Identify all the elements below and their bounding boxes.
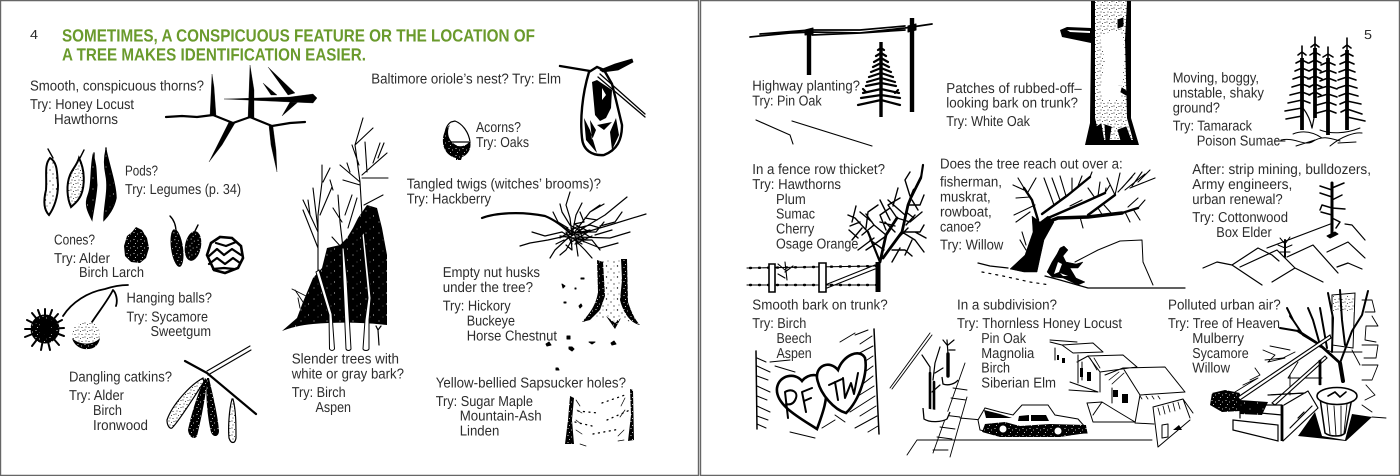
- text: hanging balls: [126, 290, 212, 340]
- text: subdivision: Pin Oak: [981, 331, 1027, 347]
- icon: bark with sapsucker holes: [565, 389, 634, 446]
- text: acorns: Try: Oaks: [476, 135, 529, 151]
- icon: tamarack trees: [1275, 37, 1365, 146]
- text: rubbed bark: looking bark on trunk?: [946, 96, 1078, 112]
- text: witches' brooms: [407, 176, 601, 208]
- text: catkins: Birch: [93, 403, 122, 419]
- text: nut husks: under the tree?: [443, 280, 533, 296]
- title: SOMETIMES, A CONSPICUOUS FEATURE OR THE LOCATION OF: [62, 26, 535, 46]
- icon: urban steps, trash can and tree of heaven: [1210, 290, 1386, 441]
- icon: pods: [44, 148, 116, 220]
- text: catkins: Ironwood: [93, 418, 148, 434]
- text: nut husks: Empty nut husks: [443, 265, 540, 281]
- icon: hanging balls: [25, 285, 128, 350]
- icon: trunk with nut husks: [546, 259, 640, 370]
- icon: thorny branches: [166, 65, 317, 172]
- text: cones: [54, 232, 144, 281]
- text: pods: [125, 164, 241, 198]
- text: thorns: Try: Honey Locust: [30, 97, 134, 113]
- text: boggy ground: ground?: [1173, 100, 1220, 116]
- text: strip mining: [1192, 162, 1371, 241]
- text: sapsucker holes: Mountain-Ash: [460, 409, 542, 425]
- text: smooth bark: Aspen: [776, 346, 812, 362]
- text: nut husks: Buckeye: [467, 314, 515, 330]
- text: fence row: [752, 162, 885, 253]
- text: subdivision: In a subdivision?: [957, 298, 1057, 314]
- text: rubbed bark: Try: White Oak: [946, 114, 1031, 130]
- text: smooth bark: Smooth bark on trunk?: [752, 298, 888, 314]
- text: slender trees: Slender trees with: [292, 352, 399, 368]
- text: boggy ground: Poison Sumac: [1197, 134, 1280, 150]
- text: polluted urban air: Sycamore: [1192, 346, 1249, 362]
- text: rubbed bark: Patches of rubbed-off–: [946, 81, 1082, 97]
- text: sapsucker holes: Yellow-bellied Sapsucker holes?: [436, 376, 626, 392]
- text: willow: canoe?: [940, 219, 981, 235]
- text: subdivision: Magnolia: [981, 346, 1034, 362]
- icon: catkins: [167, 346, 256, 442]
- text: strip mining: After: strip mining, bulldozers,: [1192, 162, 1371, 178]
- text: strip mining: Try: Cottonwood: [1192, 210, 1288, 226]
- text: strip mining: urban renewal?: [1192, 192, 1283, 208]
- page number 5: 5: [1364, 27, 1372, 42]
- text: sapsucker holes: Try: Sugar Maple: [436, 394, 533, 410]
- icon: trunk with rubbed-off bark: [1060, 1, 1139, 145]
- text: nut husks: Try: Hickory: [443, 298, 511, 314]
- text: smooth bark: [752, 298, 888, 362]
- text: subdivision: [957, 298, 1122, 392]
- icon: highway with utility poles and pine: [750, 18, 932, 146]
- text: thorns: [30, 78, 204, 128]
- text: fence row: Plum: [776, 192, 806, 208]
- text: fence row: Try: Hawthorns: [752, 177, 841, 193]
- text: boggy ground: Try: Tamarack: [1173, 119, 1253, 135]
- text: catkins: [69, 370, 172, 434]
- text: smooth bark: Beech: [776, 331, 812, 347]
- text: polluted urban air: Try: Tree of Heaven: [1168, 316, 1280, 332]
- text: willow: rowboat,: [940, 204, 992, 220]
- text: polluted urban air: [1168, 298, 1281, 377]
- text: hanging balls: Try: Sycamore: [126, 310, 208, 326]
- icon: slender birch trees: [282, 118, 388, 350]
- text: rubbed bark: [946, 81, 1082, 130]
- text: cones: Try: Alder: [54, 251, 110, 267]
- icon: carved hearts on bark: [756, 329, 879, 438]
- text: nut husks: [443, 265, 557, 344]
- icon: cones: [124, 216, 243, 273]
- text: slender trees: Aspen: [316, 400, 351, 416]
- text: witches' brooms: Try: Hackberry: [407, 192, 492, 208]
- text: boggy ground: [1173, 71, 1280, 150]
- text: boggy ground: Moving, boggy,: [1173, 71, 1259, 87]
- text: catkins: Dangling catkins?: [69, 370, 172, 386]
- text: polluted urban air: Willow: [1192, 361, 1231, 377]
- text: smooth bark: Try: Birch: [752, 316, 806, 332]
- text: slender trees: [291, 352, 404, 416]
- text: oriole nest: Baltimore oriole’s nest? Try: Elm: [371, 72, 561, 88]
- text: willow: Try: Willow: [940, 237, 1004, 253]
- text: highway planting: [752, 78, 860, 109]
- text: pods: Pods?: [125, 164, 158, 180]
- text: hanging balls: Sweetgum: [150, 324, 211, 340]
- text: acorns: Acorns?: [476, 120, 521, 136]
- icon: fence and hawthorn thicket: [747, 165, 926, 292]
- text: boggy ground: unstable, shaky: [1173, 86, 1265, 102]
- text: pods: Try: Legumes (p. 34): [125, 182, 241, 198]
- icon: hills with bare trees: [1203, 183, 1365, 285]
- icon: willow with fisherman: [978, 170, 1185, 288]
- page number 4: 4: [30, 27, 38, 42]
- text: subdivision: Birch: [981, 361, 1010, 377]
- text: thorns: Hawthorns: [54, 112, 118, 128]
- title: [62, 26, 535, 64]
- text: subdivision: Siberian Elm: [981, 376, 1056, 392]
- title: A TREE MAKES IDENTIFICATION EASIER.: [62, 44, 366, 64]
- text: slender trees: white or gray bark?: [291, 367, 404, 383]
- text: willow: fisherman,: [940, 175, 1002, 191]
- text: hanging balls: Hanging balls?: [126, 290, 212, 306]
- text: catkins: Try: Alder: [69, 388, 124, 404]
- text: highway planting: Try: Pin Oak: [752, 93, 822, 109]
- text: polluted urban air: Mulberry: [1192, 331, 1245, 347]
- text: cones: Birch Larch: [79, 265, 144, 281]
- text: fence row: Cherry: [776, 222, 815, 238]
- text: cones: Cones?: [54, 232, 95, 248]
- text: strip mining: Box Elder: [1216, 225, 1272, 241]
- icon: oriole nest: [560, 59, 645, 155]
- text: slender trees: Try: Birch: [292, 385, 346, 401]
- text: highway planting: Highway planting?: [752, 78, 860, 94]
- text: fence row: Sumac: [776, 207, 815, 223]
- text: willow: [940, 156, 1123, 253]
- text: willow: muskrat,: [940, 189, 991, 205]
- icon: subdivision street with car and houses: [890, 333, 1193, 457]
- text: acorns: [476, 120, 529, 151]
- text: thorns: Smooth, conspicuous thorns?: [30, 78, 204, 94]
- text: sapsucker holes: [436, 376, 626, 439]
- text: polluted urban air: Polluted urban air?: [1168, 298, 1281, 314]
- text: sapsucker holes: Linden: [460, 423, 499, 439]
- text: willow: Does the tree reach out over a:: [940, 156, 1123, 172]
- text: fence row: In a fence row thicket?: [752, 162, 885, 178]
- text: fence row: Osage Orange: [776, 237, 858, 253]
- icon: witches' broom: [482, 192, 646, 258]
- text: witches' brooms: Tangled twigs (witches’ brooms)?: [407, 176, 601, 192]
- text: subdivision: Try: Thornless Honey Locust: [957, 316, 1122, 332]
- text: strip mining: Army engineers,: [1192, 177, 1292, 193]
- icon: acorn: [443, 121, 471, 160]
- text: nut husks: Horse Chestnut: [467, 328, 557, 344]
